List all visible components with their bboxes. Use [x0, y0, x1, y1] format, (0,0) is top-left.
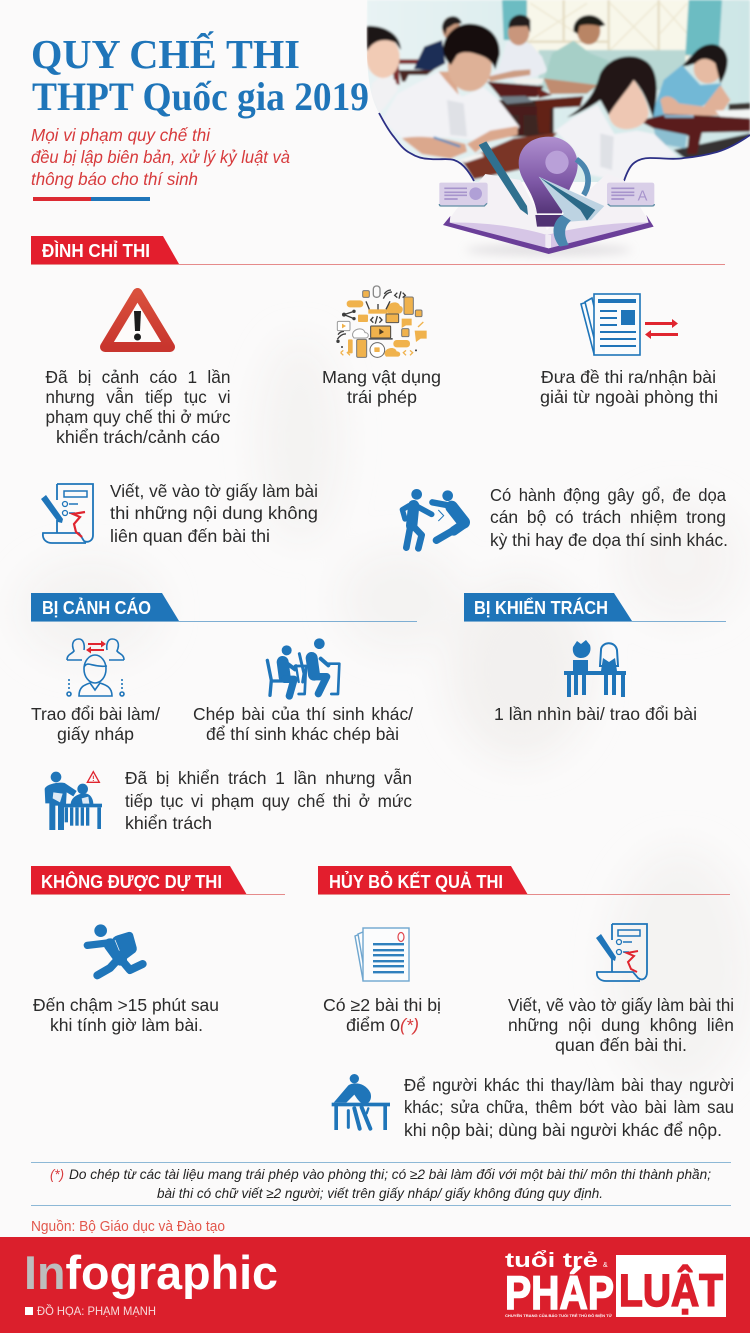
text: writing unrelated content: quan đến bài thi.: [555, 1035, 687, 1055]
text: one glance: 1 lần nhìn bài/ trao đổi bài: [494, 704, 697, 724]
text: threatening behaviour: kỳ thi hay đe dọa thí sinh khác.: [490, 530, 728, 550]
logo: Tuổi Trẻ & Pháp Luật: CHUYÊN TRANG CỦA BÁO TUỔI TRẺ THỦ ĐÔ ĐIỆN TỬ: [505, 1313, 613, 1318]
logo: Tuổi Trẻ & Pháp Luật: &: [603, 1262, 608, 1269]
middle boy: [488, 15, 548, 82]
text: exchanging answers: Trao đổi bài làm/: [31, 704, 160, 724]
text: writing unrelated content: [508, 995, 734, 1055]
heading: BỊ KHIỂN TRÁCH: [464, 593, 726, 622]
left girl: [366, 26, 401, 113]
logo: Tuổi Trẻ & Pháp Luật: tuổi trẻ: [505, 1250, 598, 1272]
wall below window and dark floor: [498, 49, 750, 158]
icon: writing on answer sheet: [41, 484, 93, 543]
front desk: [462, 133, 557, 179]
text: writing unrelated content: liên quan đến bài thi: [110, 526, 270, 546]
text: warned once: nhưng vẫn tiếp tục vi: [46, 386, 230, 407]
subtitle: đều bị lập biên bản, xử lý kỷ luật và: [31, 147, 290, 167]
title: [31, 31, 369, 119]
book shadow: [465, 245, 632, 255]
heading: HỦY BỎ KẾT QUẢ THI: [318, 866, 730, 895]
text: reprimanded once: Đã bị khiển trách 1 lần nhưng vẫn: [125, 767, 412, 788]
text: impersonation: Để người khác thi thay/làm bài thay người: [404, 1075, 734, 1095]
icon: student head down at desk: [332, 1074, 390, 1130]
logo: Tuổi Trẻ & Pháp Luật: PHÁP: [505, 1266, 614, 1319]
text: late arrival: Đến chậm >15 phút sau: [33, 995, 219, 1015]
text: copying: để thí sinh khác chép bài: [206, 724, 399, 744]
subtitle: Mọi vi phạm quy chế thi: [31, 125, 211, 145]
bulb: [519, 137, 588, 227]
text: writing unrelated content: thi những nội dung không: [110, 503, 318, 523]
text: unauthorized items: Mang vật dụng: [322, 367, 441, 387]
front girl: [555, 56, 678, 183]
text: late arrival: [33, 995, 219, 1035]
text: warned once: Đã bị cảnh cáo 1 lần: [46, 367, 230, 387]
window: [527, 0, 689, 63]
right desk: [639, 109, 750, 154]
icon: fighting figures: [402, 489, 464, 548]
heading: ĐÌNH CHỈ THI: ĐÌNH CHỈ THI: [42, 240, 150, 261]
text: reprimanded once: khiển trách: [125, 813, 212, 833]
heading: BỊ KHIỂN TRÁCH: BỊ KHIỂN TRÁCH: [474, 597, 608, 618]
text: late arrival: khi tính giờ làm bài.: [50, 1015, 203, 1035]
credit: ĐỒ HỌA: PHẠM MẠNH: [37, 1303, 156, 1318]
title: QUY CHẾ THI: [31, 31, 300, 77]
icon: cloud of devices: [336, 286, 427, 357]
back boy in navy: [414, 16, 462, 71]
subtitle: [31, 125, 290, 189]
curtains: [502, 0, 722, 55]
text: writing unrelated content: những nội dung không liên: [508, 1015, 734, 1035]
text: reprimanded once: tiếp tục vi phạm quy chế thi ở mức: [125, 791, 412, 811]
hero outline curve: [379, 113, 750, 181]
icon: running student: [87, 924, 143, 975]
text: reprimanded once: [125, 767, 412, 833]
text: two zero scores: điểm 0(*): [346, 1015, 419, 1035]
text: writing unrelated content: Viết, vẽ vào tờ giấy làm bài thi: [508, 995, 734, 1015]
icon: warned student group: [45, 772, 102, 830]
text: warned once: [46, 367, 231, 447]
text: threatening behaviour: Có hành động gây gổ, đe dọa: [490, 485, 726, 505]
footer band: [0, 1237, 750, 1333]
title: THPT Quốc gia 2019: [32, 74, 369, 119]
title rule: [33, 197, 150, 201]
text: threatening behaviour: [490, 485, 728, 550]
source: Nguồn: Bộ Giáo dục và Đào tạo: [31, 1219, 225, 1235]
logo: Tuổi Trẻ & Pháp Luật: [505, 1250, 726, 1319]
footnote: [31, 1162, 731, 1206]
text: two zero scores: [323, 995, 441, 1035]
illustration: book with bulb, pen and paper plane: [439, 137, 654, 255]
icon: two students at desk: [564, 640, 626, 697]
icon: zero-score papers: [355, 928, 409, 981]
heading: BỊ CẢNH CÁO: BỊ CẢNH CÁO: [42, 597, 151, 618]
paper on desk: [510, 78, 544, 84]
paper plane: [539, 177, 604, 247]
text: warned once: khiển trách/cảnh cáo: [56, 427, 220, 447]
text: impersonation: [404, 1075, 734, 1140]
card left: [439, 183, 488, 206]
icon: documents with arrows: [581, 294, 678, 355]
text: writing unrelated content: [110, 481, 318, 546]
text: exam passing: [540, 367, 718, 407]
right girl in blue: [652, 42, 731, 119]
text: threatening behaviour: cán bộ có trách nhiệm trong: [490, 507, 726, 527]
wordmark: Infographic: Infographic: [24, 1246, 278, 1299]
text: two zero scores: Có ≥2 bài thi bị: [323, 995, 441, 1015]
hero photo: students in exam room: [366, 0, 750, 187]
text: copying: Chép bài của thí sinh khác/: [193, 704, 413, 724]
logo: Tuổi Trẻ & Pháp Luật: LUẬT: [619, 1265, 723, 1316]
icon: exchanging papers: [67, 639, 124, 696]
teacher in striped shirt: [544, 15, 609, 94]
text: exam passing: giải từ ngoài phòng thi: [540, 387, 718, 407]
text: unauthorized items: [322, 367, 441, 407]
text: impersonation: khi nộp bài; dùng bài người khác để nộp.: [404, 1120, 722, 1140]
icon: writing on answer sheet: [596, 924, 647, 981]
footnote: (*): [50, 1167, 64, 1182]
icon: warning triangle: [105, 293, 170, 347]
text: exam passing: Đưa đề thi ra/nhận bài: [541, 367, 716, 387]
heading: ĐÌNH CHỈ THI: [31, 236, 725, 265]
heading: BỊ CẢNH CÁO: [31, 593, 417, 622]
footnote: Do chép từ các tài liệu mang trái phép vào phòng thi; có ≥2 bài làm đối với một bài thi/ môn thi thành phần;: [69, 1167, 711, 1182]
desks and chair: [392, 59, 584, 135]
text: copying: [193, 704, 413, 744]
subtitle: thông báo cho thí sinh: [31, 169, 198, 189]
text: exchanging answers: giấy nháp: [57, 724, 134, 744]
text: writing unrelated content: Viết, vẽ vào tờ giấy làm bài: [110, 481, 318, 501]
pen: [479, 141, 528, 215]
front boy: [382, 24, 519, 163]
text: exchanging answers: [31, 704, 160, 744]
heading: HỦY BỎ KẾT QUẢ THI: HỦY BỎ KẾT QUẢ THI: [329, 871, 503, 892]
text: warned once: phạm quy chế thi ở mức: [46, 407, 231, 427]
card right: A: [638, 188, 648, 204]
icon: copying students: [267, 638, 339, 696]
book: [443, 173, 654, 254]
heading: KHÔNG ĐƯỢC DỰ THI: [31, 866, 285, 895]
heading: KHÔNG ĐƯỢC DỰ THI: KHÔNG ĐƯỢC DỰ THI: [41, 871, 222, 892]
text: impersonation: khác; sửa chữa, thêm bớt vào bài làm sau: [404, 1097, 734, 1117]
footnote: bài thi có chữ viết ≥2 người; viết trên giấy nháp/ giấy không đúng quy định.: [157, 1186, 603, 1201]
card right: [607, 183, 654, 206]
text: unauthorized items: trái phép: [347, 387, 417, 407]
